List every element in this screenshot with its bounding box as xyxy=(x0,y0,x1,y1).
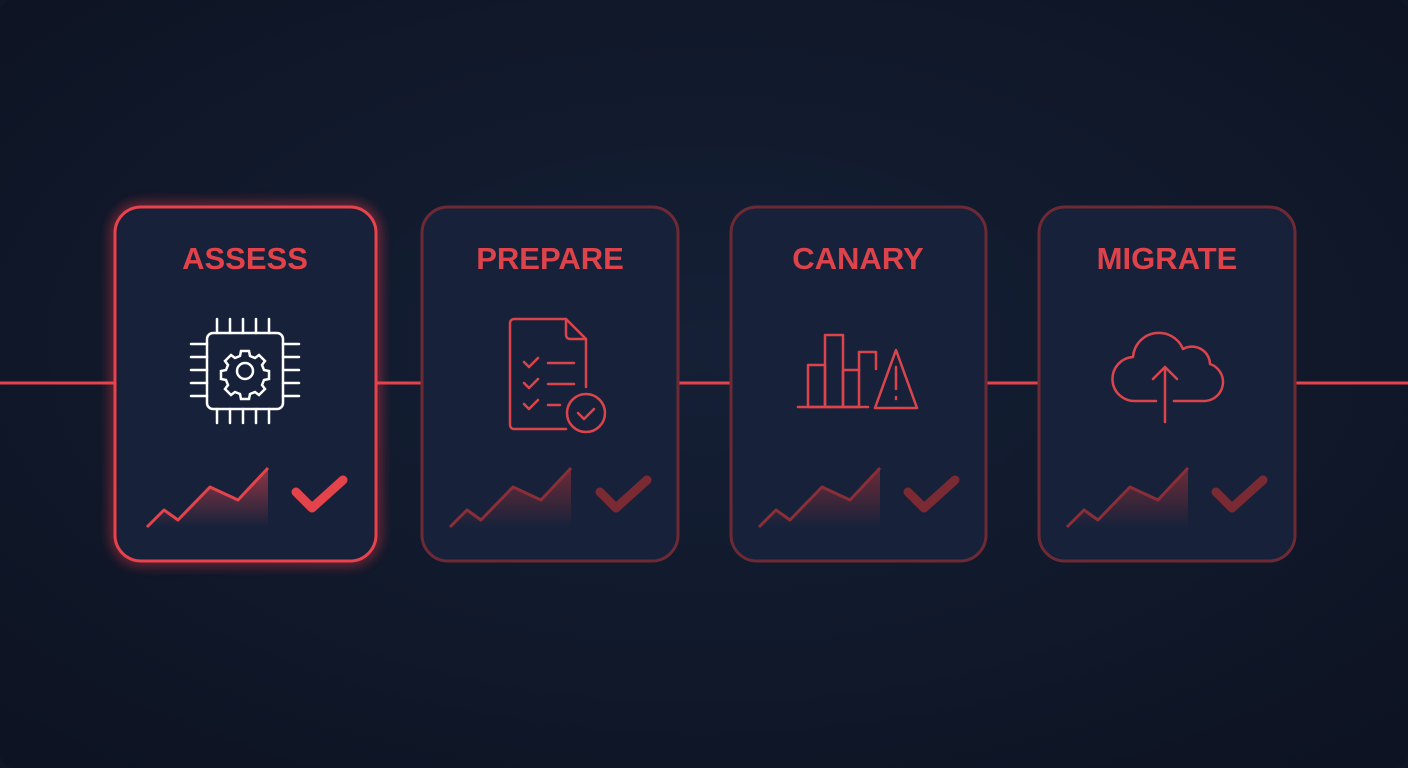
heading: ASSESS xyxy=(182,241,308,276)
panel: migrate xyxy=(1039,207,1295,561)
connector line xyxy=(0,380,1408,386)
icon: checkmark xyxy=(1216,480,1263,508)
chart xyxy=(147,468,268,527)
heading: MIGRATE xyxy=(1097,241,1237,276)
panel: prepare xyxy=(422,207,678,561)
icon: checkmark xyxy=(296,480,343,508)
heading: PREPARE xyxy=(476,241,624,276)
heading: CANARY xyxy=(792,241,924,276)
icon: chip with gear xyxy=(191,319,299,423)
chart xyxy=(759,468,880,527)
icon: checkmark xyxy=(908,480,955,508)
chart xyxy=(450,468,571,527)
panel: canary xyxy=(731,207,986,561)
icon: bar chart with warning xyxy=(798,335,917,408)
chart xyxy=(1067,468,1188,527)
icon: checklist document xyxy=(510,319,605,432)
panel: assess xyxy=(115,207,376,561)
icon: checkmark xyxy=(600,480,647,508)
icon: cloud upload xyxy=(1112,333,1223,422)
